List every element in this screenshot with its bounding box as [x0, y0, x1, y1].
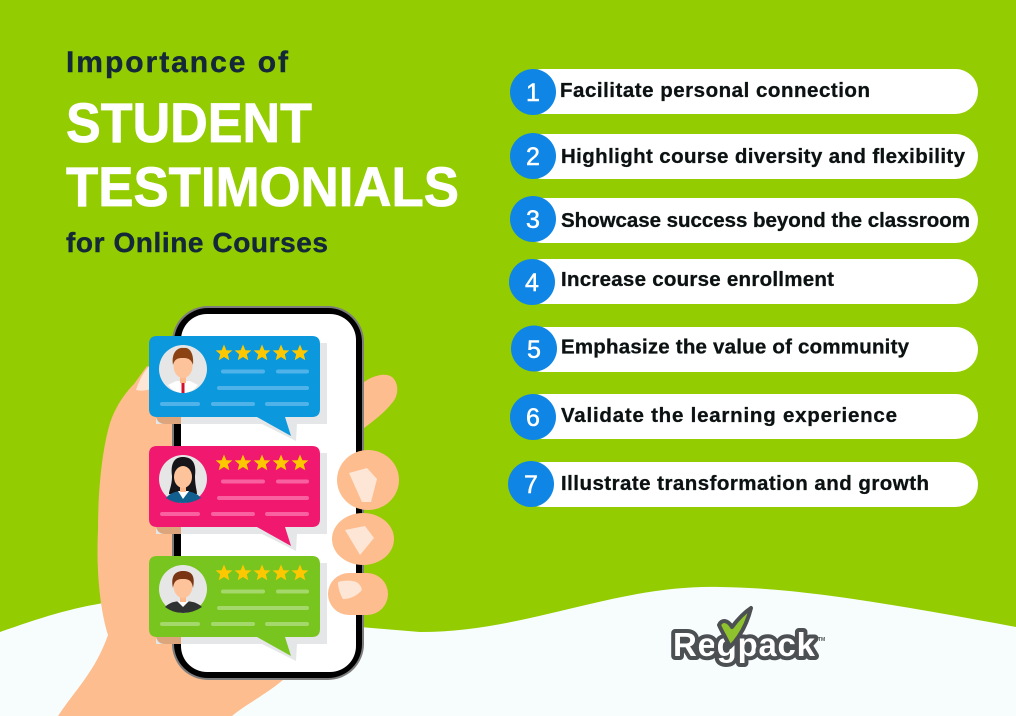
avatar: man with red tie — [159, 345, 207, 393]
item 4 — [509, 259, 978, 305]
card shadow — [156, 343, 327, 441]
item 4: 4 — [525, 269, 539, 297]
speech bubble — [149, 556, 320, 656]
stars — [216, 564, 308, 580]
review card: pink — [149, 446, 327, 551]
card shadow — [156, 453, 327, 551]
text lines — [160, 370, 309, 406]
item 7: Illustrate transformation and growth — [561, 472, 929, 495]
logo trademark: TM — [818, 637, 825, 643]
review card: blue — [149, 336, 327, 441]
text lines — [160, 480, 309, 516]
title line: student: STUDENT — [66, 91, 312, 154]
item 4: Increase course enrollment — [561, 268, 834, 291]
item 6 — [510, 394, 978, 440]
item 5 — [511, 326, 978, 372]
list of seven reasons — [508, 69, 978, 507]
stars — [216, 454, 308, 470]
finger 2 — [337, 450, 399, 510]
card shadow — [156, 563, 327, 661]
logo checkmark — [719, 608, 751, 647]
avatar: man in suit — [159, 565, 207, 613]
review card: green — [149, 556, 327, 661]
item 1: Facilitate personal connection — [560, 79, 870, 102]
item 2 — [510, 133, 978, 179]
item 7 — [508, 461, 978, 507]
item 3 — [510, 196, 978, 243]
item 1 — [510, 69, 978, 115]
item 2: Highlight course diversity and flexibility — [561, 145, 966, 168]
title line: for online courses: for Online Courses — [66, 227, 328, 258]
stars — [216, 344, 308, 360]
item 7: 7 — [524, 471, 538, 499]
finger 3 — [332, 513, 394, 565]
logo wordmark: Regpack — [673, 626, 816, 663]
speech bubble — [149, 336, 320, 436]
phone — [172, 306, 364, 680]
text lines — [160, 590, 309, 626]
speech bubble — [149, 446, 320, 546]
title — [66, 46, 459, 258]
item 3: Showcase success beyond the classroom — [561, 209, 970, 232]
item 1: 1 — [526, 79, 540, 107]
thumb nail — [136, 366, 150, 391]
title line: importance of: Importance of — [66, 46, 289, 79]
item 5: Emphasize the value of community — [561, 336, 910, 358]
finger 1 — [364, 375, 397, 428]
item 6: Validate the learning experience — [561, 404, 897, 427]
white wave — [0, 587, 1016, 716]
title line: testimonials: TESTIMONIALS — [66, 155, 459, 218]
item 5: 5 — [527, 336, 541, 364]
finger 4 — [328, 573, 388, 615]
item 2: 2 — [526, 143, 540, 171]
item 3: 3 — [526, 206, 540, 234]
logo: Regpack — [673, 608, 825, 663]
avatar: woman — [159, 455, 207, 503]
illustration: hand holding phone with reviews — [58, 306, 399, 716]
item 6: 6 — [526, 404, 540, 432]
hand palm and thumb — [58, 366, 283, 716]
